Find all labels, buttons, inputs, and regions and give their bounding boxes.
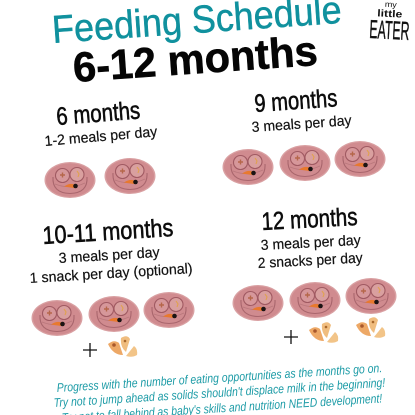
logo: my little eater xyxy=(369,0,411,46)
icon: plus xyxy=(284,330,298,344)
note text xyxy=(53,361,386,415)
text: 1-2 meals per day: 1-2 meals per day xyxy=(44,124,159,150)
text: 3 meals per day: 3 meals per day xyxy=(260,233,362,254)
heading: 10-11 months: 10-11 months xyxy=(42,214,174,250)
icon: snack 1 xyxy=(309,322,338,343)
icon: plus xyxy=(83,343,97,357)
icon: snack 2 xyxy=(356,317,385,338)
logo: my little eater: little xyxy=(377,8,403,21)
text: 2 snacks per day: 2 snacks per day xyxy=(257,250,364,272)
panel: 9 months xyxy=(222,84,386,185)
panel: 10-11 months xyxy=(29,214,194,357)
heading: 9 months: 9 months xyxy=(253,84,338,118)
icon: plates x2 xyxy=(44,158,156,198)
icon: plates x3 xyxy=(32,292,194,336)
heading: 6 months: 6 months xyxy=(55,96,141,131)
text: 3 meals per day: 3 meals per day xyxy=(251,113,353,136)
text: 1 snack per day (optional): 1 snack per day (optional) xyxy=(29,261,193,287)
panel: 6 months xyxy=(44,96,159,198)
icon: snack xyxy=(108,336,137,357)
icon: plates x3 xyxy=(222,141,386,185)
subtitle: 6-12 months: 6-12 months xyxy=(71,27,319,91)
icon: plates x3 xyxy=(232,278,396,321)
heading: 12 months: 12 months xyxy=(261,203,358,236)
text: 3 meals per day: 3 meals per day xyxy=(58,245,161,267)
panel: 12 months xyxy=(232,203,396,344)
